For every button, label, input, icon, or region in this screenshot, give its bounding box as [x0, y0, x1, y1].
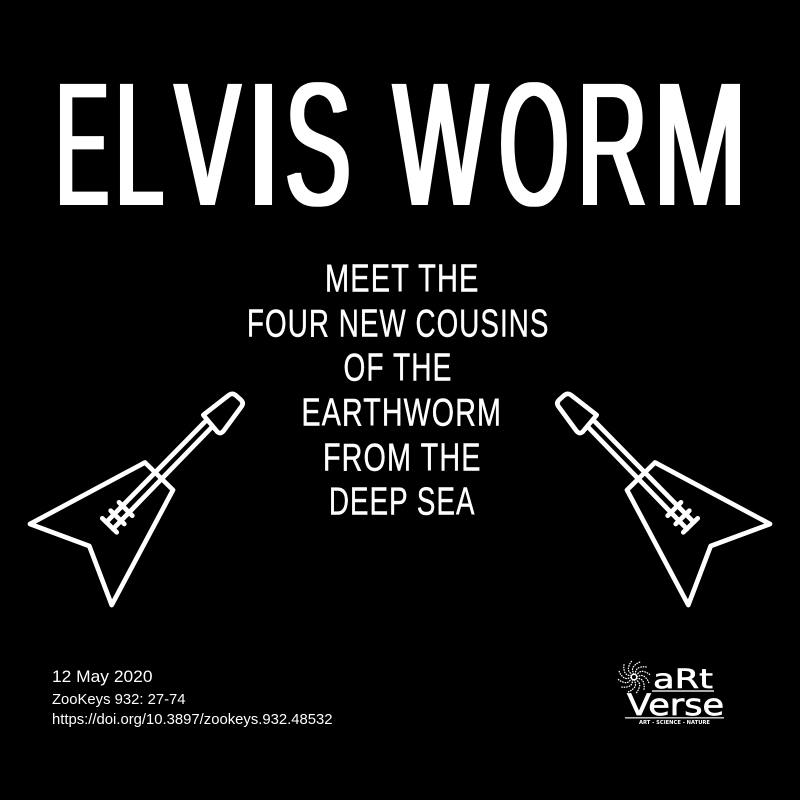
logo: aRt Verse: [618, 661, 724, 726]
citation text block: 12 May 2020: [52, 667, 152, 686]
title: V: [175, 47, 240, 243]
subtitle text block: DEEP SEA: [329, 481, 476, 524]
title: M: [653, 47, 747, 243]
title: L: [115, 47, 163, 243]
logo wordmark: aRt: [653, 664, 713, 695]
subtitle text block: MEET THE: [325, 258, 480, 301]
subtitle text block: [247, 258, 550, 524]
citation text block: [52, 667, 332, 728]
subtitle text block: EARTHWORM: [302, 392, 502, 435]
icon: left flying V guitar: [30, 394, 243, 605]
logo: aRt Verse: Verse: [627, 688, 724, 722]
citation text block: ZooKeys 932: 27-74: [52, 692, 186, 708]
subtitle text block: OF THE: [344, 347, 452, 390]
title: O: [499, 47, 569, 243]
title: W: [394, 47, 488, 243]
subtitle text block: FROM THE: [323, 437, 482, 480]
logo spiral icon: [618, 661, 650, 693]
title: E: [56, 47, 109, 243]
title: S: [285, 47, 351, 243]
logo: aRt Verse: ART - SCIENCE - NATURE: [639, 720, 711, 726]
icon: right flying V guitar: [557, 394, 770, 605]
subtitle text block: FOUR NEW COUSINS: [247, 303, 550, 346]
title: R: [578, 47, 647, 243]
title: [56, 47, 747, 243]
citation text block: https://doi.org/10.3897/zookeys.932.48532: [52, 712, 332, 728]
title: I: [246, 47, 281, 243]
